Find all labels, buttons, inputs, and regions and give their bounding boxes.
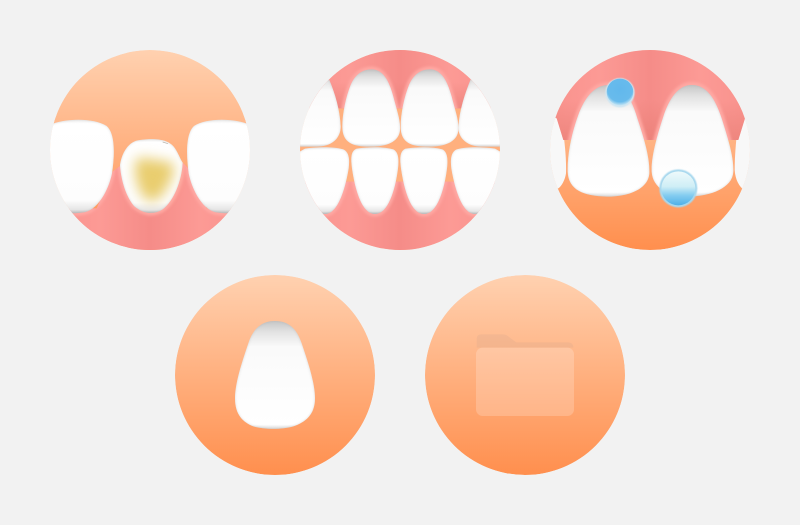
upper left tooth xyxy=(568,85,649,197)
gum highlight around teeth xyxy=(567,82,732,140)
left tooth xyxy=(43,120,114,213)
icon: folder xyxy=(476,334,574,416)
panel: full bite with upper and lower teeth xyxy=(293,50,507,253)
side teeth xyxy=(547,107,753,190)
upper gum xyxy=(550,50,750,140)
stained centre tooth xyxy=(120,139,183,213)
gum highlight around teeth xyxy=(323,66,477,217)
upper teeth xyxy=(293,69,507,147)
panel: folder icon xyxy=(425,275,625,475)
yellow stain xyxy=(135,158,174,201)
tooth xyxy=(235,321,315,429)
large blue bubble xyxy=(659,169,697,207)
panel: single veneer tooth xyxy=(175,275,375,475)
illustration sheet xyxy=(50,50,750,475)
upper right tooth xyxy=(652,85,733,197)
chip mark xyxy=(163,142,168,144)
gum highlight around teeth xyxy=(72,163,228,216)
lower teeth xyxy=(297,147,503,214)
lower gum xyxy=(300,182,500,253)
upper gum xyxy=(300,50,500,108)
panel: damaged stained tooth xyxy=(50,50,250,250)
panel: teeth with bubbles xyxy=(547,50,753,250)
gum xyxy=(69,168,231,250)
right tooth xyxy=(187,120,257,213)
small blue bubble xyxy=(605,78,635,107)
